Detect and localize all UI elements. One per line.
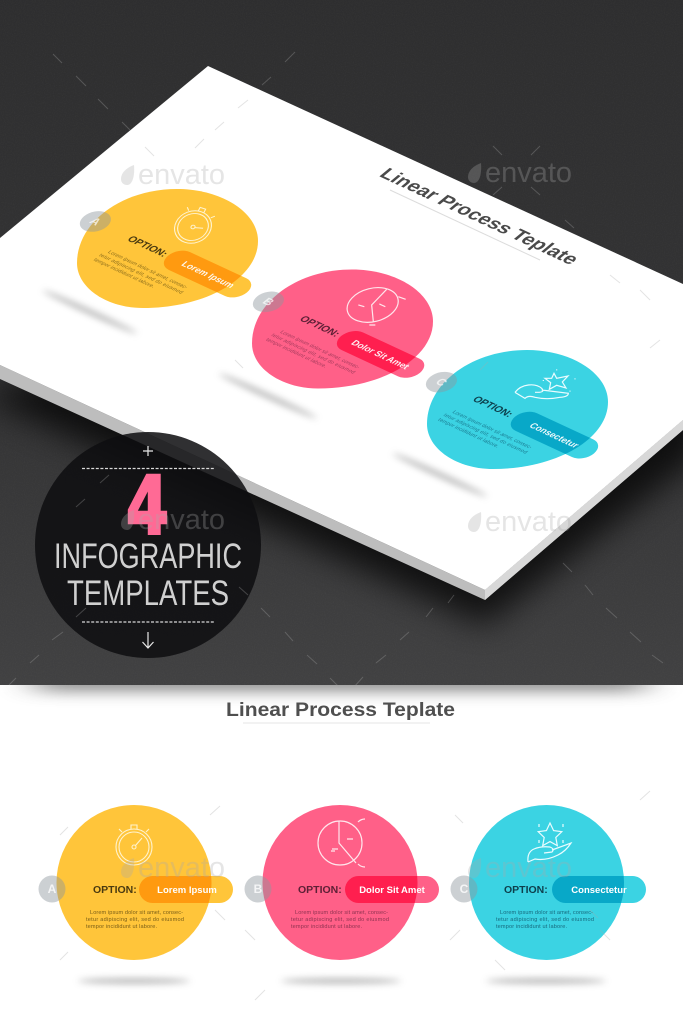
isometric item A: yellow: A <box>86 216 104 228</box>
watermarks: envato <box>485 506 572 538</box>
dark textured background <box>0 0 683 685</box>
isometric item B: pink: tetur adipiscing elit, sed do eiusmod <box>269 333 356 375</box>
lower white panel <box>12 685 668 702</box>
watermarks: envato <box>138 159 225 191</box>
isometric item B: pink: tempor incididunt ut labore. <box>264 338 329 369</box>
flat item B: pink: B <box>254 882 263 896</box>
isometric item B: pink <box>246 270 433 394</box>
flat item B: pink: tempor incididunt ut labore. <box>291 924 362 930</box>
watermarks: envato <box>138 852 225 884</box>
isometric item A: yellow: Lorem Ipsum <box>179 260 237 290</box>
isometric item C: teal: Lorem ipsum dolor sit amet, consec- <box>450 410 533 450</box>
flat item C: teal: Consectetur <box>571 885 627 896</box>
isometric item B: pink: Lorem ipsum dolor sit amet, consec- <box>278 330 361 370</box>
badge: 4 infographic templates <box>35 432 261 658</box>
flat item C: teal: tetur adipiscing elit, sed do eiusmod <box>496 917 594 923</box>
badge: 4 infographic templates: 4 <box>126 460 169 552</box>
flat item B: pink: Dolor Sit Amet <box>359 885 426 896</box>
isometric item C: teal: OPTION: <box>469 395 515 419</box>
flat item A: yellow: OPTION: <box>93 884 137 896</box>
flat item C: teal: Lorem ipsum dolor sit amet, consec- <box>500 910 593 916</box>
isometric item C: teal: Consectetur <box>527 421 582 450</box>
isometric item C: teal: tetur adipiscing elit, sed do eiusmod <box>441 413 529 455</box>
isometric item C: teal: C <box>432 376 450 389</box>
isometric title: Linear Process Teplate <box>375 164 584 268</box>
flat item C: teal: tempor incididunt ut labore. <box>496 924 567 930</box>
watermarks: envato <box>485 852 572 884</box>
isometric sheet <box>0 66 683 600</box>
isometric item B: pink: Dolor Sit Amet <box>349 339 412 371</box>
flat heading: Linear Process Teplate <box>226 700 455 721</box>
flat item shadows <box>78 978 606 984</box>
isometric item C: teal: tempor incididunt ut labore. <box>436 418 501 449</box>
watermarks: envato <box>138 504 225 536</box>
isometric item A: yellow: OPTION: <box>124 235 170 259</box>
isometric item A: yellow: Lorem ipsum dolor sit amet, consec- <box>106 250 189 290</box>
flat item A: yellow <box>38 805 233 960</box>
sheet drop shadow <box>0 380 683 634</box>
isometric item A: yellow: tetur adipiscing elit, sed do eiusmod <box>97 253 184 295</box>
isometric item B: pink: B <box>259 296 277 308</box>
badge: 4 infographic templates: INFOGRAPHIC <box>54 537 242 576</box>
flat item C: teal <box>450 805 646 960</box>
flat item B: pink: tetur adipiscing elit, sed do eiusmod <box>291 917 389 923</box>
isometric item A: yellow: tempor incididunt ut labore. <box>92 258 156 290</box>
flat item C: teal: OPTION: <box>504 884 548 896</box>
isometric item shadows <box>42 288 488 499</box>
flat item B: pink: Lorem ipsum dolor sit amet, consec- <box>295 910 388 916</box>
flat item B: pink <box>244 805 439 960</box>
flat item A: yellow: tetur adipiscing elit, sed do eiusmod <box>86 917 184 923</box>
watermarks <box>121 157 572 884</box>
flat item B: pink: OPTION: <box>298 884 342 896</box>
flat item C: teal: C <box>460 882 469 896</box>
badge: 4 infographic templates: TEMPLATES <box>67 574 229 613</box>
flat item A: yellow: Lorem Ipsum <box>157 885 217 896</box>
flat item A: yellow: A <box>48 882 57 896</box>
isometric item C: teal <box>419 350 608 473</box>
flat item A: yellow: tempor incididunt ut labore. <box>86 924 157 930</box>
isometric item B: pink: OPTION: <box>296 315 342 339</box>
watermarks: envato <box>485 157 572 189</box>
isometric item A: yellow <box>73 189 258 313</box>
flat item A: yellow: Lorem ipsum dolor sit amet, consec- <box>90 910 183 916</box>
